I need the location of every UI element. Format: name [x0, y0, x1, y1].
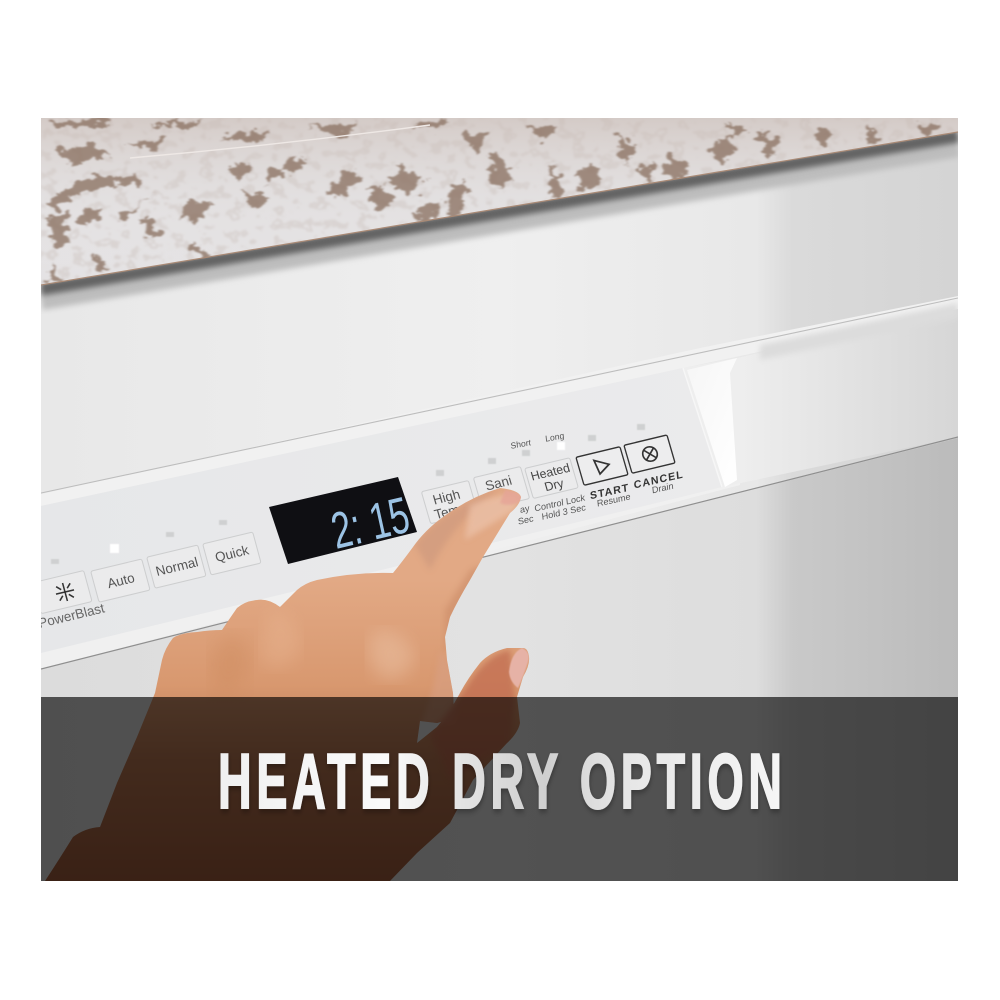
infographic: dishwasher control panel photo with caption [41, 118, 958, 881]
button: Cancel [624, 435, 675, 473]
button: Normal: Normal [154, 554, 200, 579]
small panel labels: Control Lock [534, 492, 586, 514]
small panel labels: Short [510, 437, 532, 451]
small panel labels: START [590, 482, 630, 502]
button: Heated Dry: Heated [529, 461, 572, 484]
handle band [41, 296, 958, 506]
white handle wedge [687, 358, 737, 487]
button: Heated Dry: Dry [543, 476, 566, 494]
button: High Temp [421, 480, 478, 524]
granite countertop [41, 118, 958, 288]
small panel labels [510, 430, 684, 527]
small panel labels: Sec [517, 513, 534, 527]
shadow under countertop [41, 136, 958, 299]
small panel labels: Long [545, 430, 565, 444]
small panel labels: CANCEL [633, 469, 684, 491]
status lights [51, 424, 645, 564]
small panel labels: Resume [596, 491, 631, 509]
small panel labels: Drain [651, 481, 674, 495]
button: Sani [473, 466, 530, 502]
caption band [41, 697, 958, 881]
button: Normal [147, 545, 206, 588]
small panel labels: Hold 3 Sec [541, 502, 587, 522]
button: Quick: Quick [213, 542, 251, 565]
time display: 2: 15 [326, 486, 414, 560]
small panel labels: ay [519, 503, 530, 515]
button: Auto [91, 559, 150, 602]
hand pressing the button [41, 480, 541, 881]
granite flecks [45, 118, 942, 282]
button: High Temp: Temp [433, 500, 468, 522]
button: Start [576, 447, 628, 485]
button: PowerBlast [41, 570, 106, 628]
control panel face [41, 368, 958, 669]
caption text: HEATED DRY OPTION [218, 738, 782, 825]
button: Quick [203, 532, 261, 575]
countertop edge [41, 132, 958, 285]
time display [269, 477, 417, 564]
button: Auto: Auto [106, 570, 136, 591]
button: Heated Dry [525, 458, 578, 499]
door lower background [41, 438, 958, 881]
door upper background [41, 132, 958, 650]
button: Sani: Sani [483, 473, 514, 493]
button: High Temp: High [431, 487, 462, 508]
button: PowerBlast: PowerBlast [37, 600, 106, 631]
